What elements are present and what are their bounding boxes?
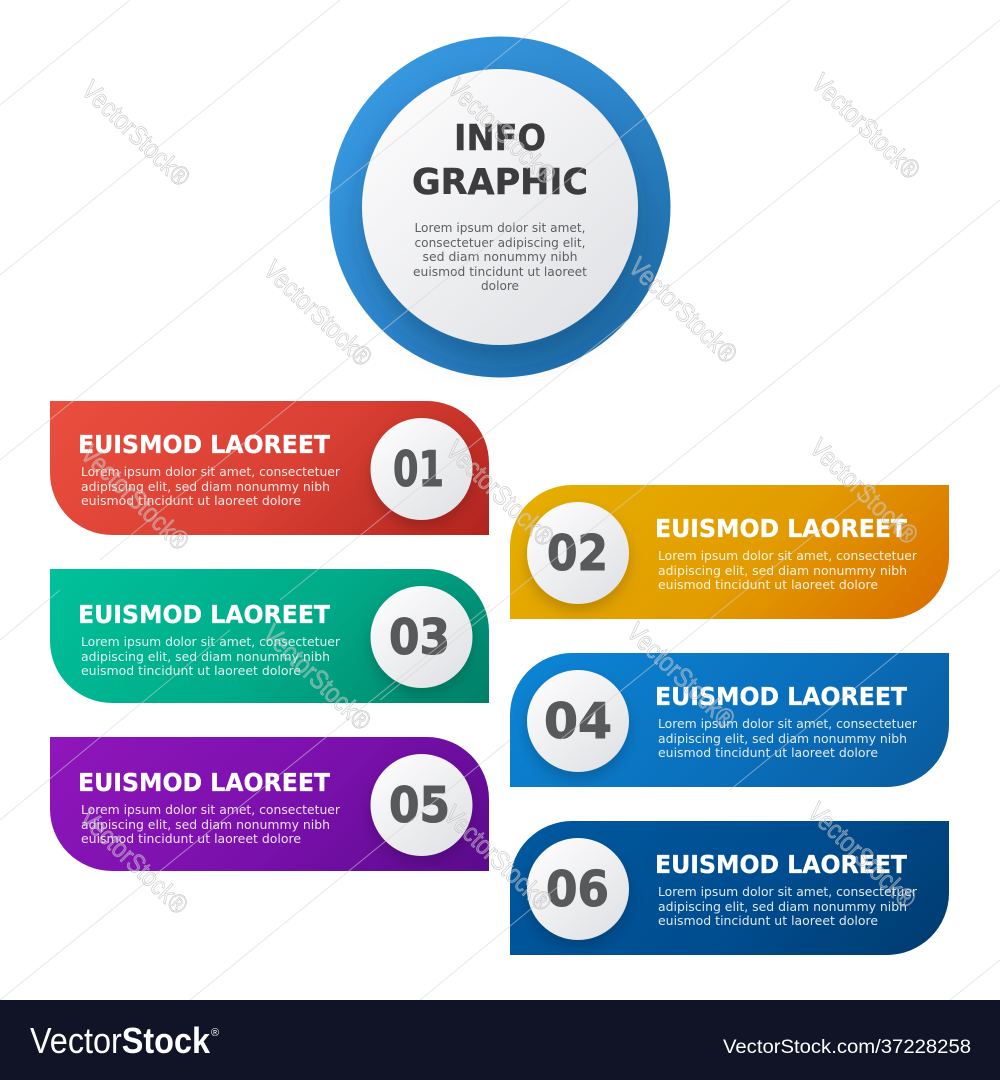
description: dolore <box>481 278 519 293</box>
panel: 01 red <box>50 401 489 535</box>
watermarks: VectorStock® <box>257 619 377 736</box>
title: INFO <box>454 118 546 159</box>
text 04: Lorem ipsum dolor sit amet, consectetuer <box>658 716 918 731</box>
heading 04: EUISMOD LAOREET <box>655 682 907 711</box>
central circle <box>330 36 670 378</box>
inner white disc <box>362 69 638 345</box>
text 05: adipiscing elit, sed diam nonummy nibh <box>81 817 330 832</box>
number badge 04 <box>527 670 629 772</box>
description: Lorem ipsum dolor sit amet, <box>414 220 586 235</box>
title <box>412 118 588 203</box>
number badge 06 <box>527 838 629 940</box>
description: euismod tincidunt ut laoreet <box>413 264 587 279</box>
watermarks: VectorStock® <box>258 255 378 372</box>
watermarks <box>74 68 926 920</box>
number badge 04: 04 <box>544 693 612 750</box>
text 06: adipiscing elit, sed diam nonummy nibh <box>658 899 907 914</box>
number badge 03: 03 <box>389 609 450 666</box>
watermarks: VectorStock® <box>802 797 922 914</box>
number badge 03 <box>370 586 472 688</box>
text 01: euismod tincidunt ut laoreet dolore <box>81 493 301 508</box>
outer blue ring <box>330 36 670 378</box>
watermarks: VectorStock® <box>623 252 743 369</box>
number badge 06: 06 <box>546 861 609 918</box>
watermarks: VectorStock® <box>442 73 562 190</box>
text 02: Lorem ipsum dolor sit amet, consectetuer <box>658 548 918 563</box>
text 03: Lorem ipsum dolor sit amet, consectetuer <box>81 634 341 649</box>
watermarks: VectorStock® <box>806 68 926 185</box>
number badge 02: 02 <box>547 525 608 582</box>
text 01: Lorem ipsum dolor sit amet, consectetuer <box>81 464 341 479</box>
watermarks: VectorStock® <box>804 433 924 550</box>
text 04 <box>658 716 918 760</box>
text 02: euismod tincidunt ut laoreet dolore <box>658 577 878 592</box>
watermarks: VectorStock® <box>438 800 558 917</box>
heading 03: EUISMOD LAOREET <box>78 600 330 629</box>
number badge 02 <box>527 502 629 604</box>
number badge 05: 05 <box>389 777 450 834</box>
watermarks: VectorStock® <box>440 435 560 552</box>
number badge 01 <box>370 418 472 520</box>
footer bar <box>0 1000 1000 1080</box>
text 05 <box>81 802 341 846</box>
number badge 01: 01 <box>393 441 444 498</box>
watermarks: VectorStock® <box>621 617 741 734</box>
panel: 02 yellow <box>510 485 949 619</box>
registered mark: ® <box>211 1027 219 1039</box>
footer url: VectorStock.com/37228258 <box>723 1037 971 1058</box>
heading 01: EUISMOD LAOREET <box>78 430 330 459</box>
text 04: adipiscing elit, sed diam nonummy nibh <box>658 731 907 746</box>
text 02: adipiscing elit, sed diam nonummy nibh <box>658 563 907 578</box>
footer logo: VectorStock <box>30 1020 211 1061</box>
panel: 03 green <box>50 569 489 703</box>
text 05: Lorem ipsum dolor sit amet, consectetuer <box>81 802 341 817</box>
text 01: adipiscing elit, sed diam nonummy nibh <box>81 479 330 494</box>
text 03 <box>81 634 341 678</box>
description: sed diam nonummy nibh <box>422 249 578 264</box>
panel: 05 purple <box>50 737 489 871</box>
panel: 06 navy <box>510 821 949 955</box>
description: consectetuer adipiscing elit, <box>414 235 586 250</box>
title: GRAPHIC <box>412 162 588 203</box>
watermarks: VectorStock® <box>75 439 195 556</box>
description <box>413 220 587 293</box>
text 02 <box>658 548 918 592</box>
heading 05: EUISMOD LAOREET <box>78 768 330 797</box>
watermarks: VectorStock® <box>74 803 194 920</box>
number badge 05 <box>370 754 472 856</box>
text 03: adipiscing elit, sed diam nonummy nibh <box>81 649 330 664</box>
text 01 <box>81 464 341 508</box>
text 06: euismod tincidunt ut laoreet dolore <box>658 913 878 928</box>
heading 06: EUISMOD LAOREET <box>655 850 907 879</box>
text 04: euismod tincidunt ut laoreet dolore <box>658 745 878 760</box>
watermarks: VectorStock® <box>76 75 196 192</box>
panel: 04 blue <box>510 653 949 787</box>
text 03: euismod tincidunt ut laoreet dolore <box>81 663 301 678</box>
text 06 <box>658 884 918 928</box>
heading 02: EUISMOD LAOREET <box>655 514 907 543</box>
text 05: euismod tincidunt ut laoreet dolore <box>81 831 301 846</box>
text 06: Lorem ipsum dolor sit amet, consectetuer <box>658 884 918 899</box>
